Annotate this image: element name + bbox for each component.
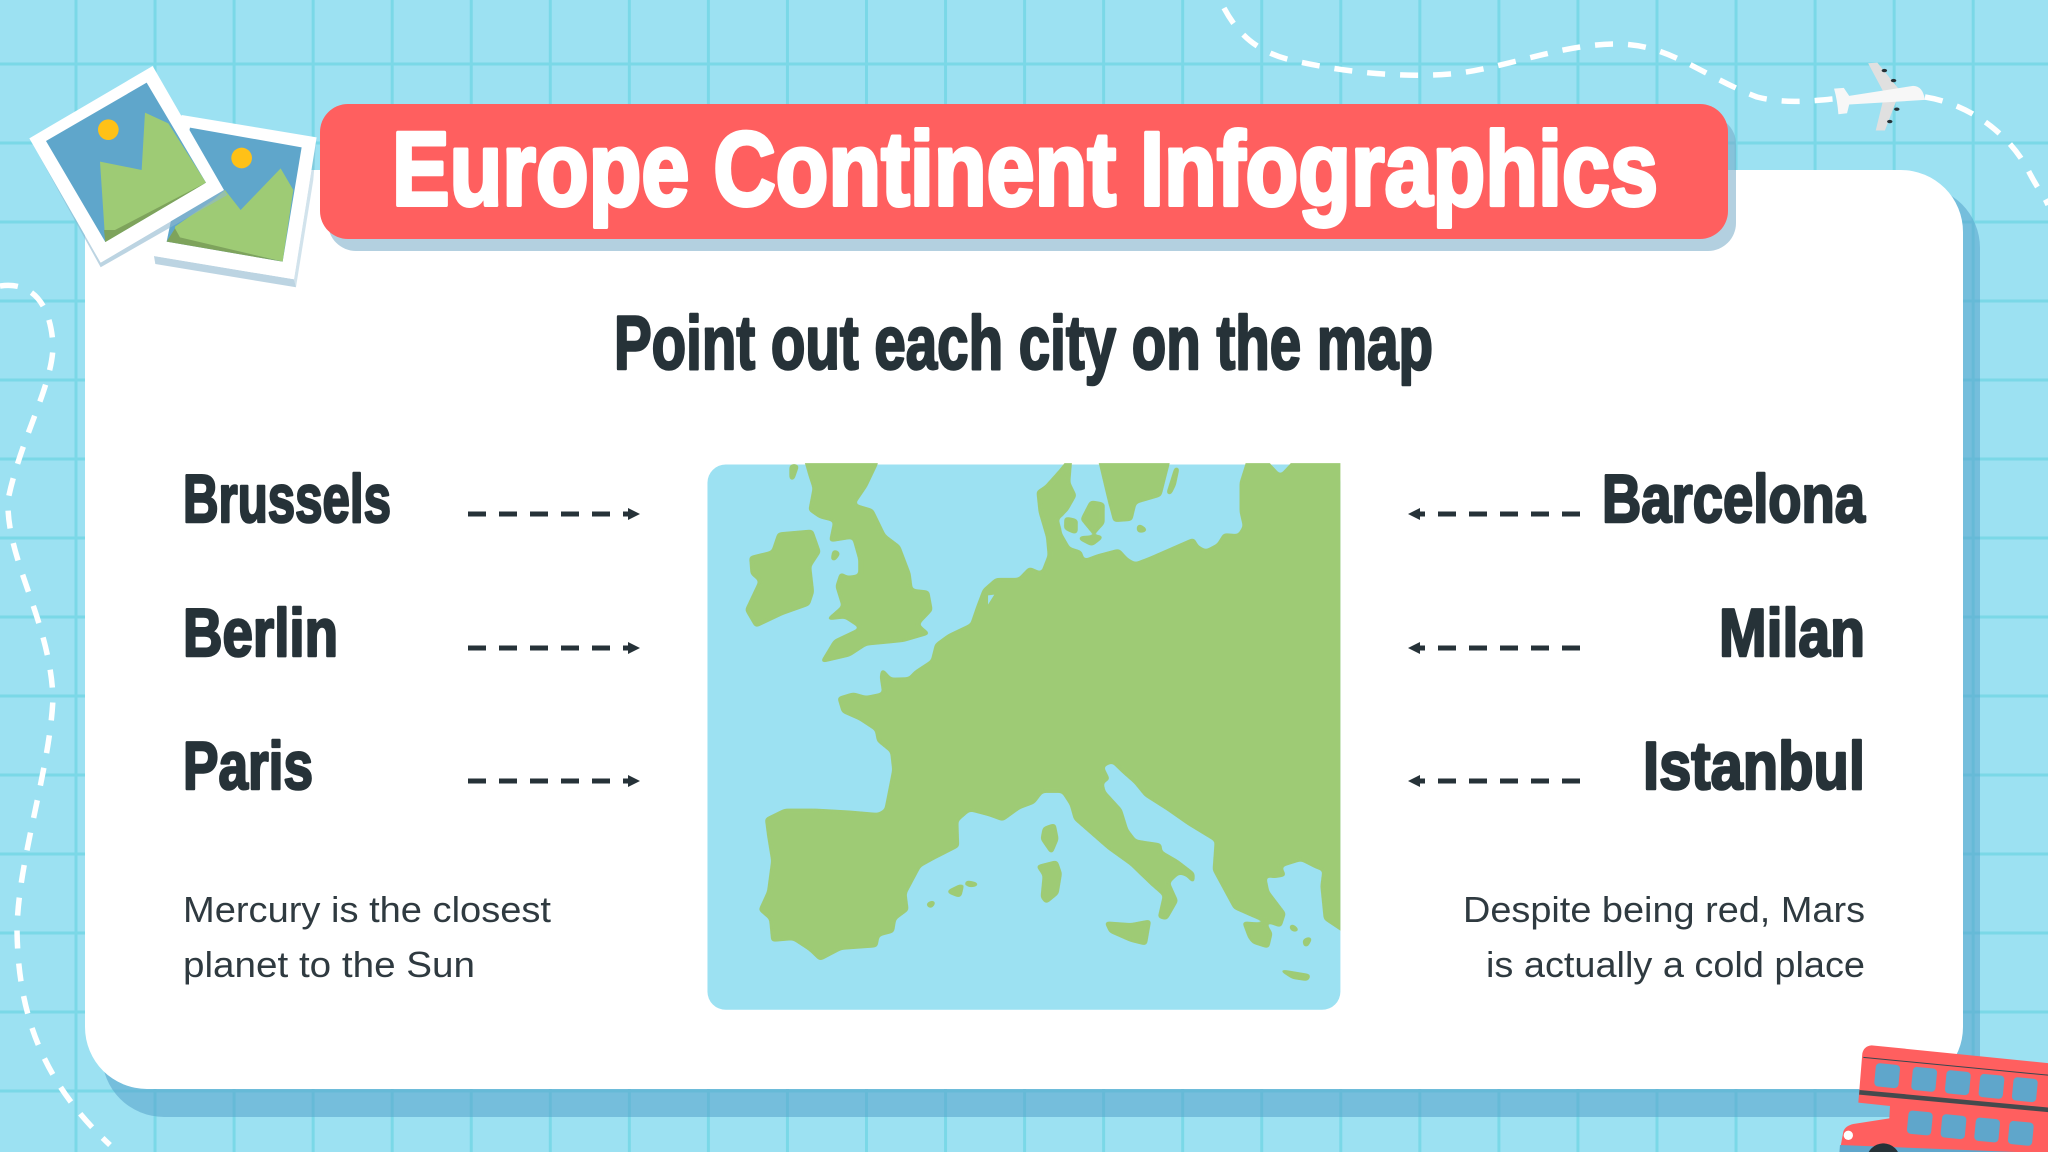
icon: photographs xyxy=(29,66,317,287)
map of Europe xyxy=(707,454,1363,1010)
dashed flight path: top right xyxy=(1224,8,2048,205)
city: Istanbul: Istanbul xyxy=(1643,728,1865,804)
text block: Mars: is actually a cold place xyxy=(1486,944,1865,985)
text block: Mercury: planet to the Sun xyxy=(183,944,475,985)
right city list xyxy=(1602,461,1866,804)
city: Milan: Milan xyxy=(1719,595,1865,671)
arrow: Paris xyxy=(468,775,640,787)
city: Berlin: Berlin xyxy=(183,595,338,671)
arrow: Milan xyxy=(1408,642,1580,654)
arrow: Berlin xyxy=(468,642,640,654)
panel: white card xyxy=(85,170,1963,1089)
dashed flight path: left xyxy=(0,285,110,1145)
text block: Mercury xyxy=(183,889,551,985)
icon: red double-decker bus xyxy=(1839,1045,2048,1152)
heading: Point out each city on the map xyxy=(614,301,1433,386)
Sweden xyxy=(1098,454,1168,521)
arrow: Brussels xyxy=(468,508,640,520)
Sardinia xyxy=(1038,861,1061,903)
small islands xyxy=(792,466,1309,945)
Corsica xyxy=(1042,824,1057,853)
text block: Mars: Despite being red, Mars xyxy=(1463,889,1865,930)
Ireland xyxy=(746,531,819,626)
panel: card shadow xyxy=(102,186,1980,1117)
city: Paris: Paris xyxy=(183,728,313,804)
Crete xyxy=(1282,971,1309,980)
title banner xyxy=(320,104,1736,251)
Great Britain xyxy=(804,454,931,662)
Sicily xyxy=(1106,921,1150,944)
city: Barcelona: Barcelona xyxy=(1602,461,1866,537)
mainland Europe xyxy=(760,454,1363,960)
text block: Mercury: Mercury is the closest xyxy=(183,889,551,930)
arrow: Istanbul xyxy=(1408,775,1580,787)
icon: airplane xyxy=(1834,63,1925,131)
left city list xyxy=(183,461,391,804)
text block: Mars xyxy=(1463,889,1865,985)
title: Europe Continent Infographics xyxy=(392,111,1658,228)
Peloponnese xyxy=(1244,923,1271,947)
city: Brussels: Brussels xyxy=(183,461,391,537)
arrow: Barcelona xyxy=(1408,508,1580,520)
